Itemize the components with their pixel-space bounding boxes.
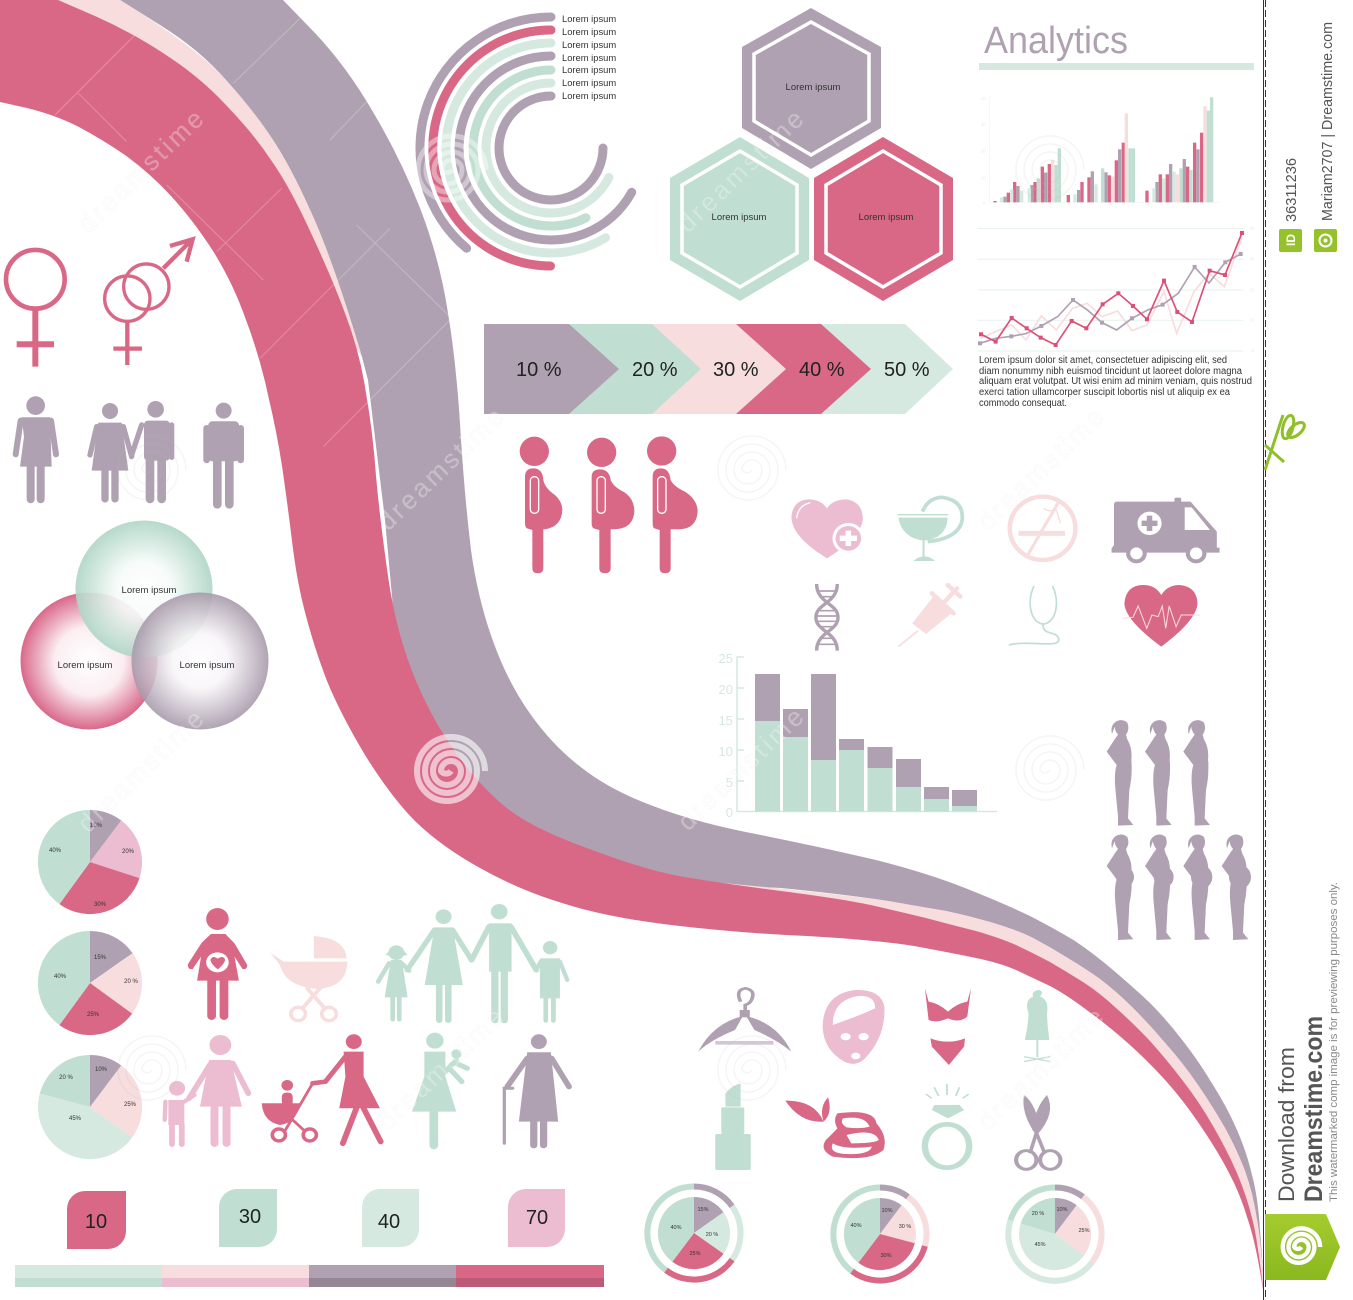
ring pie chart A: 15%: [697, 1207, 709, 1213]
ring pie chart B: 40%: [850, 1223, 862, 1229]
icon: pregnancy silhouettes: [1107, 720, 1251, 940]
pie chart 1: [38, 810, 142, 914]
arc chart labels: Lorem ipsum: [562, 90, 616, 101]
chevron progress arrow: 30 %: [713, 359, 759, 381]
grouped bar chart: 10: [981, 175, 986, 180]
icon: mother and child: [165, 1035, 248, 1144]
grouped bar chart: 0: [983, 201, 986, 206]
ring pie chart C: 25%: [1078, 1228, 1090, 1234]
number tag: 70: 70: [526, 1207, 548, 1229]
watermark text: dreamstime: [671, 700, 811, 836]
dreamstime brand: Dreamstime.com: [1300, 1016, 1328, 1202]
icon: pregnant pictograms: [520, 436, 698, 573]
pie chart 1: 30%: [94, 902, 107, 908]
watermark text: dreamstime: [371, 400, 511, 536]
watermark text: dreamstime: [971, 400, 1111, 536]
ring pie chart A: 20 %: [706, 1232, 718, 1238]
pie chart 3: 10%: [95, 1067, 108, 1073]
icon: spa stones and leaves: [785, 1097, 885, 1158]
watermark swirl on arcs: [418, 136, 486, 200]
hexagon: pink: [814, 137, 953, 301]
number tag: 10: 10: [85, 1211, 107, 1233]
number tag: 30: [219, 1189, 277, 1247]
pie chart 2: 40%: [54, 974, 67, 980]
icon: face mask: [823, 990, 884, 1064]
pie chart 1: 20%: [122, 849, 135, 855]
ring pie chart C: 20 %: [1032, 1211, 1044, 1217]
ring pie chart C: [1008, 1187, 1102, 1281]
grouped bar chart: 40: [981, 96, 986, 101]
ribbon: light pink strip, lower: [712, 882, 1264, 1297]
icon: diamond ring: [925, 1084, 969, 1168]
line chart: 30: [1249, 257, 1255, 262]
paragraph: lorem ipsum: exerci tation ullamcorper suscipit lobortis nisl ut aliquip ex ea: [979, 387, 1230, 398]
stacked bar chart: 25: [719, 651, 733, 666]
hexagon: mint: [670, 137, 809, 301]
pie chart 2: 25%: [87, 1012, 100, 1018]
line chart: 10: [1249, 317, 1255, 322]
ring pie chart B: 30%: [880, 1253, 892, 1259]
chevron progress arrow: [484, 324, 953, 414]
lifestyle icons: [698, 988, 1060, 1170]
icon: no smoking: [1010, 497, 1075, 560]
icon: ambulance: [1112, 498, 1220, 561]
icon: lipstick: [715, 1083, 751, 1170]
venn diagram: [20, 520, 268, 730]
number tag: 10: [67, 1191, 126, 1249]
hexagon: mauve: [742, 8, 881, 169]
chevron progress arrow: 10 %: [516, 359, 562, 381]
icon: scissors: [1016, 1095, 1060, 1169]
paragraph: lorem ipsum: aliquam erat volutpat. Ut wisi enim ad minim veniam, quis nostrud: [979, 376, 1252, 387]
paragraph: lorem ipsum: Lorem ipsum dolor sit amet, consectetuer adipiscing elit, sed: [979, 355, 1227, 366]
ID badge: ID: [1284, 234, 1298, 246]
icon: stethoscope: [1009, 586, 1059, 645]
stacked bar chart: 10: [719, 744, 733, 759]
cut line: [1264, 0, 1266, 1300]
author credit: Mariam2707 | Dreamstime.com: [1319, 22, 1336, 221]
hexagon: mauve: Lorem ipsum: [786, 82, 841, 93]
arc chart labels: Lorem ipsum: [562, 77, 616, 88]
icon: couple symbol: [105, 239, 193, 365]
chevron progress arrow: 50 %: [884, 359, 930, 381]
icon: female symbol: [6, 250, 65, 367]
arc chart labels: [562, 13, 616, 101]
number tag: 40: 40: [378, 1211, 400, 1233]
icon: dress form: [1024, 990, 1050, 1062]
hexagon: mint: Lorem ipsum: [712, 212, 767, 223]
stacked bar chart: 15: [719, 713, 733, 728]
watermark swirl on ribbon: [417, 737, 485, 801]
icon: woman with stroller: [262, 1034, 381, 1143]
ID badge: [1279, 229, 1302, 252]
arc chart labels: Lorem ipsum: [562, 26, 616, 37]
image id: 36311236: [1283, 158, 1300, 222]
number tag: 30: 30: [239, 1206, 261, 1228]
stacked bar chart: 0: [726, 805, 733, 820]
paragraph: lorem ipsum: diam nonummy nibh euismod tincidunt ut laoreet dolore magna: [979, 366, 1242, 377]
preview notice: This watermarked comp image is for previewing purposes only.: [1328, 882, 1340, 1202]
title: Analytics: Analytics: [984, 20, 1128, 62]
venn diagram: Lorem ipsum: [58, 660, 113, 671]
ring pie chart B: [833, 1187, 926, 1281]
venn diagram: Lorem ipsum: [122, 585, 177, 596]
icon: DNA helix: [816, 584, 838, 651]
stacked bar chart: 5: [726, 775, 733, 790]
number tag: 40: [362, 1189, 419, 1247]
ring pie chart A: 25%: [689, 1251, 701, 1257]
grouped bar chart: [981, 95, 1220, 206]
line chart: [977, 226, 1255, 353]
icon: baby pram: [270, 936, 347, 1021]
number tag: 70: [508, 1189, 565, 1247]
watermark text: dreamstime: [671, 102, 811, 238]
arc chart labels: Lorem ipsum: [562, 52, 616, 63]
green logo tag: [1265, 1214, 1340, 1280]
grouped bar chart: 30: [981, 122, 986, 127]
ring pie chart B: 30 %: [899, 1224, 911, 1230]
arc chart labels: Lorem ipsum: [562, 64, 616, 75]
ring pie chart A: 40%: [670, 1225, 682, 1231]
hexagon: pink: Lorem ipsum: [859, 212, 914, 223]
line chart: 40: [1249, 226, 1255, 231]
icon: pregnant woman with heart: [188, 908, 247, 1016]
ring pie chart B: 10%: [881, 1208, 893, 1214]
watermark text: dreamstime: [971, 1000, 1111, 1136]
watermark text: [71, 102, 1111, 1136]
concentric arcs chart: [420, 17, 632, 266]
copyright badge: [1314, 229, 1337, 252]
icon: heart with plus: [791, 499, 864, 558]
icon: syringe: [898, 585, 960, 647]
icon: green scissors: [1265, 414, 1307, 470]
pie chart 2: 20 %: [124, 979, 138, 985]
icon: hanger: [698, 988, 791, 1052]
icon: bowl of hygieia: [898, 497, 962, 561]
icon: woman, couple and man pictograms: [16, 396, 241, 504]
pie chart 3: 20 %: [59, 1075, 73, 1081]
arc chart labels: Lorem ipsum: [562, 13, 616, 24]
download line: Download from: [1274, 1047, 1299, 1202]
line chart: 0: [1252, 348, 1255, 353]
pie chart 3: [38, 1055, 142, 1159]
icon: woman holding baby: [412, 1033, 467, 1145]
stacked bar chart: 20: [719, 682, 733, 697]
watermark text: dreamstime: [71, 102, 211, 238]
pie chart 1: 40%: [49, 848, 62, 854]
icon: family holding hands: [378, 904, 567, 1021]
chevron progress arrow: 40 %: [799, 359, 845, 381]
segmented colour strip: [15, 1265, 604, 1287]
ring pie chart A: [647, 1186, 741, 1280]
grouped bar chart: 20: [981, 149, 986, 154]
pie chart 3: 25%: [124, 1102, 137, 1108]
icon: grandmother with cane: [504, 1034, 569, 1145]
paragraph: lorem ipsum: commodo consequat.: [979, 398, 1067, 409]
icon: heart with pulse: [1123, 585, 1200, 647]
line chart: 20: [1249, 287, 1255, 292]
medical icons: [791, 497, 1220, 651]
chevron progress arrow: 20 %: [632, 359, 678, 381]
ring pie chart C: 45%: [1034, 1242, 1046, 1248]
pie chart 2: 15%: [94, 955, 107, 961]
pie chart 2: [38, 931, 142, 1035]
people pictograms: [165, 904, 569, 1145]
pie chart 1: 10%: [90, 823, 103, 829]
icon: lingerie: [925, 988, 971, 1065]
arc chart labels: Lorem ipsum: [562, 39, 616, 50]
ribbon: light pink strip, upper: [50, 0, 362, 357]
ring pie chart C: 10%: [1056, 1207, 1068, 1213]
watermark text: dreamstime: [371, 1000, 511, 1136]
watermark text: dreamstime: [71, 702, 211, 838]
paragraph: lorem ipsum: [979, 355, 1252, 409]
venn diagram: Lorem ipsum: [180, 660, 235, 671]
stacked bar chart: [719, 651, 997, 820]
title underline bar: [979, 63, 1254, 70]
pie chart 3: 45%: [69, 1116, 82, 1122]
